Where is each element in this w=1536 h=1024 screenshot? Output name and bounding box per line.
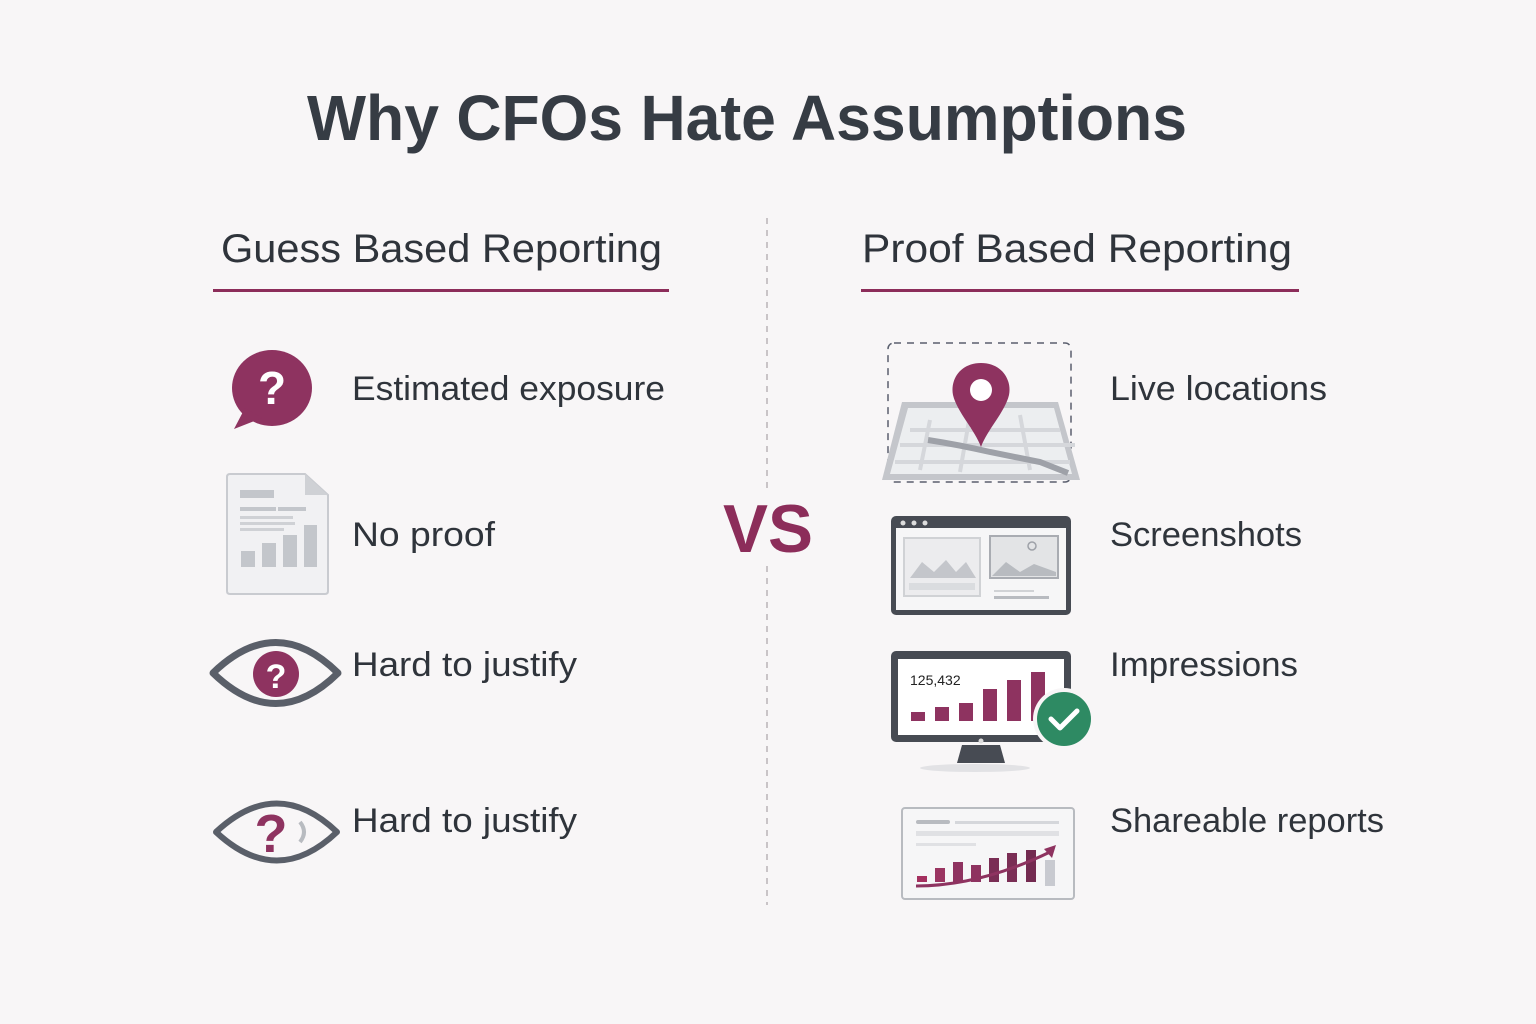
icon: eye question: ? (266, 658, 286, 696)
text: screenshots: Screenshots (1110, 516, 1302, 554)
text: live locations: Live locations (1110, 370, 1327, 408)
icon: question bubble (232, 350, 312, 429)
icon: question bubble: ? (258, 362, 286, 414)
panel: proof items (882, 343, 1384, 899)
icon: screenshots (891, 516, 1071, 615)
icon: eye question (213, 642, 338, 704)
text: shareable reports: Shareable reports (1110, 802, 1384, 840)
vs label: VS (723, 491, 813, 567)
heading: guess based: Guess Based Reporting (221, 227, 662, 271)
title: Why CFOs Hate Assumptions (307, 82, 1187, 154)
icon: monitor impressions (891, 651, 1095, 772)
text: estimated exposure: Estimated exposure (352, 370, 665, 408)
icon: eye question 2 (216, 804, 337, 864)
icon: monitor impressions: 125,432 (910, 672, 961, 688)
icon: map pin (882, 343, 1080, 482)
heading: proof based (861, 227, 1299, 292)
text: no proof: No proof (352, 516, 496, 554)
text: hard to justify 1: Hard to justify (352, 646, 577, 684)
icon: eye question 2: ? (254, 804, 288, 864)
text: hard to justify 2: Hard to justify (352, 802, 577, 840)
panel: guess items (213, 350, 665, 864)
text: impressions: Impressions (1110, 646, 1298, 684)
heading: proof based: Proof Based Reporting (862, 227, 1292, 271)
heading: guess based (213, 227, 669, 292)
icon: shareable report (902, 808, 1074, 899)
divider dashed (766, 218, 768, 905)
icon: document (227, 474, 328, 594)
